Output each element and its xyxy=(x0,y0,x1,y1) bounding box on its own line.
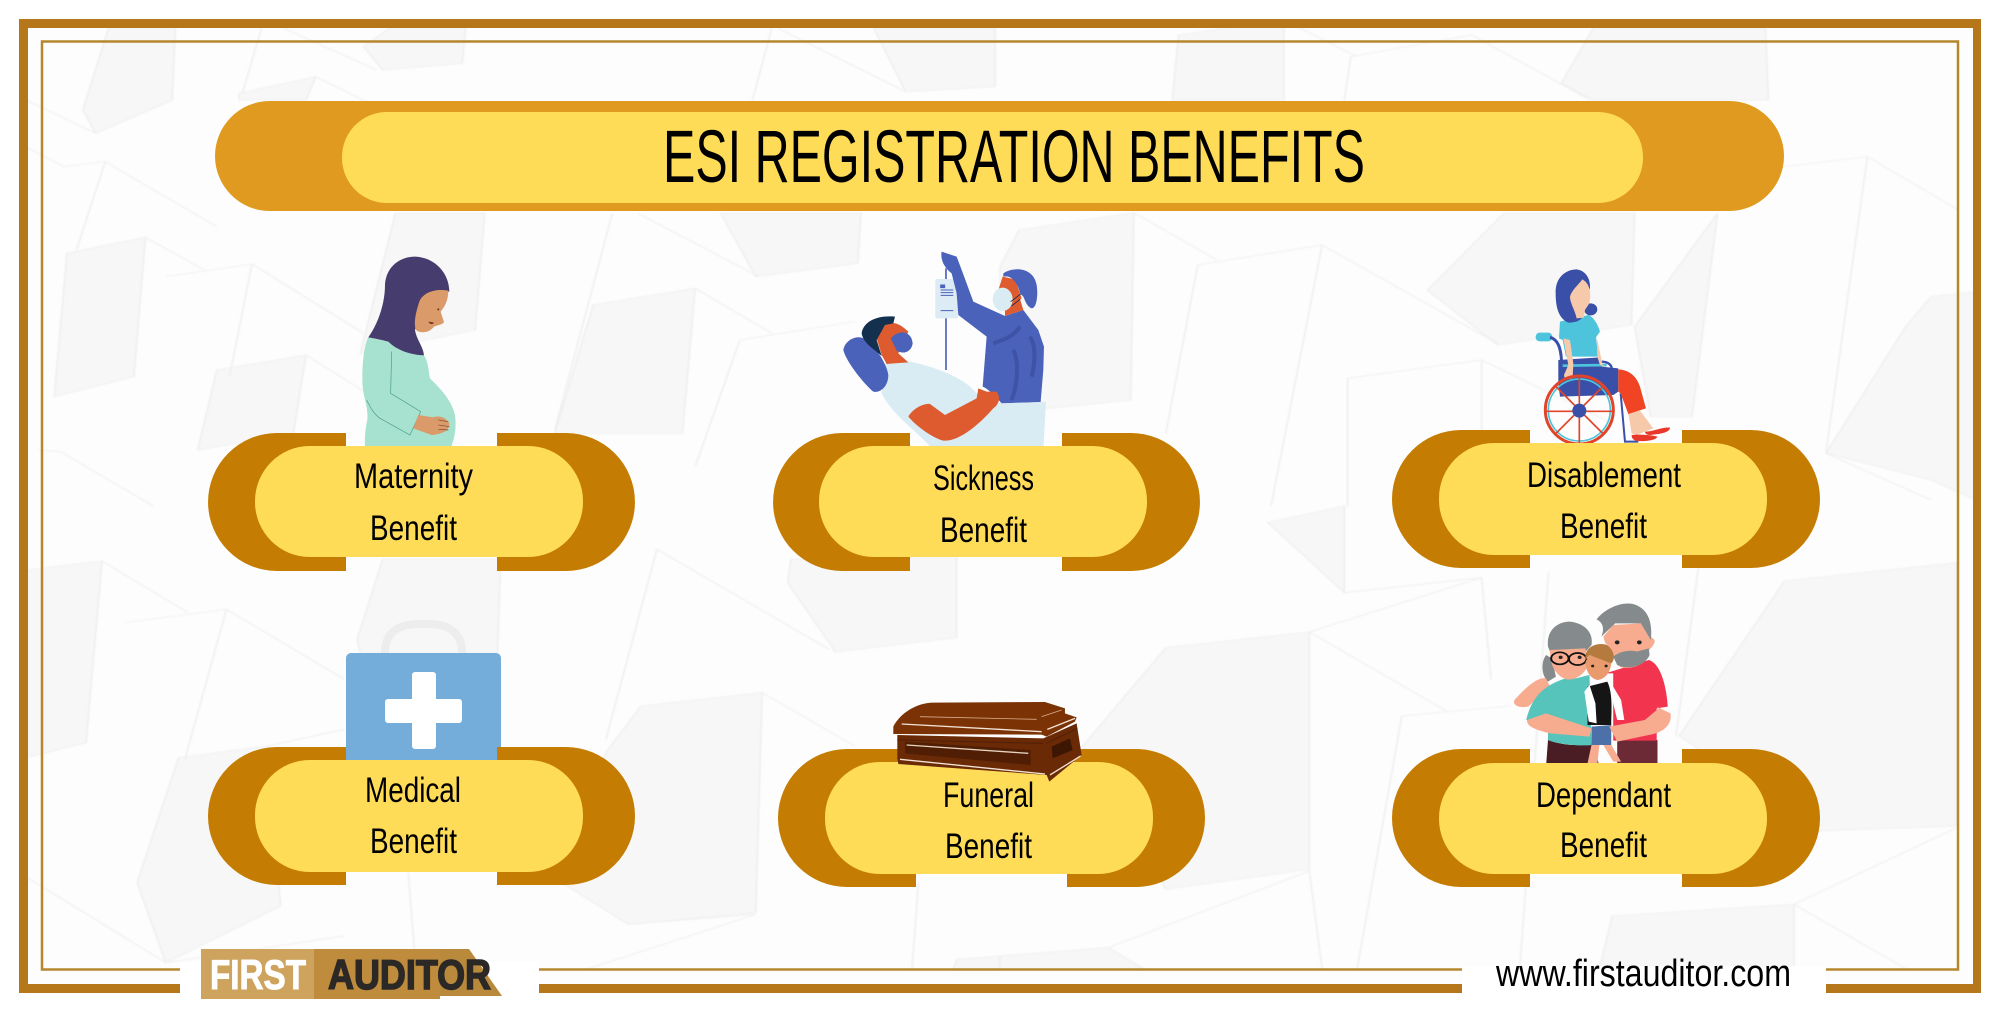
title banner xyxy=(215,101,1784,211)
card: funeral benefit xyxy=(778,702,1205,887)
label: Benefit xyxy=(1560,507,1647,546)
pill inner xyxy=(1439,443,1767,555)
label: Sickness xyxy=(933,459,1034,498)
pill backing xyxy=(773,433,1200,571)
icon: woman in wheelchair xyxy=(1536,269,1670,444)
pill inner xyxy=(255,446,583,557)
pill inner xyxy=(819,446,1147,557)
label xyxy=(365,771,461,861)
logo: first auditor: AUDITOR xyxy=(328,951,491,998)
label: Maternity xyxy=(354,457,473,496)
pill backing xyxy=(208,433,635,571)
label: Benefit xyxy=(940,511,1027,550)
logo: first auditor: FIRST xyxy=(210,951,306,998)
label: Benefit xyxy=(1560,826,1647,865)
label: Funeral xyxy=(943,776,1034,815)
label: Medical xyxy=(365,771,461,810)
pill inner xyxy=(1439,763,1767,874)
icon: patient and nurse xyxy=(843,252,1046,450)
label xyxy=(1536,776,1671,865)
label: Benefit xyxy=(370,822,457,861)
label xyxy=(354,457,473,548)
pill backing xyxy=(778,749,1205,887)
card: maternity benefit xyxy=(208,257,635,571)
card: dependant benefit xyxy=(1392,604,1820,887)
label xyxy=(1527,456,1681,546)
website url: www.firstauditor.com xyxy=(1495,953,1791,995)
pill backing xyxy=(1392,430,1820,568)
label: Disablement xyxy=(1527,456,1681,495)
pill inner xyxy=(825,762,1153,874)
card: medical benefit xyxy=(208,624,635,885)
title text: ESI REGISTRATION BENEFITS xyxy=(663,115,1365,198)
label: Benefit xyxy=(370,509,457,548)
card: disablement benefit xyxy=(1392,269,1820,568)
icon: coffin xyxy=(893,702,1082,782)
card: sickness benefit xyxy=(773,252,1200,571)
icon: pregnant woman xyxy=(362,257,456,450)
pill backing xyxy=(1392,749,1820,887)
icon: grandparents with child xyxy=(1514,604,1671,767)
label xyxy=(943,776,1034,866)
label xyxy=(933,459,1034,550)
label: Dependant xyxy=(1536,776,1671,815)
pill backing xyxy=(208,747,635,885)
label: Benefit xyxy=(945,827,1032,866)
logo: first auditor xyxy=(201,949,502,999)
pill inner xyxy=(255,760,583,872)
icon: first aid kit xyxy=(346,624,501,762)
